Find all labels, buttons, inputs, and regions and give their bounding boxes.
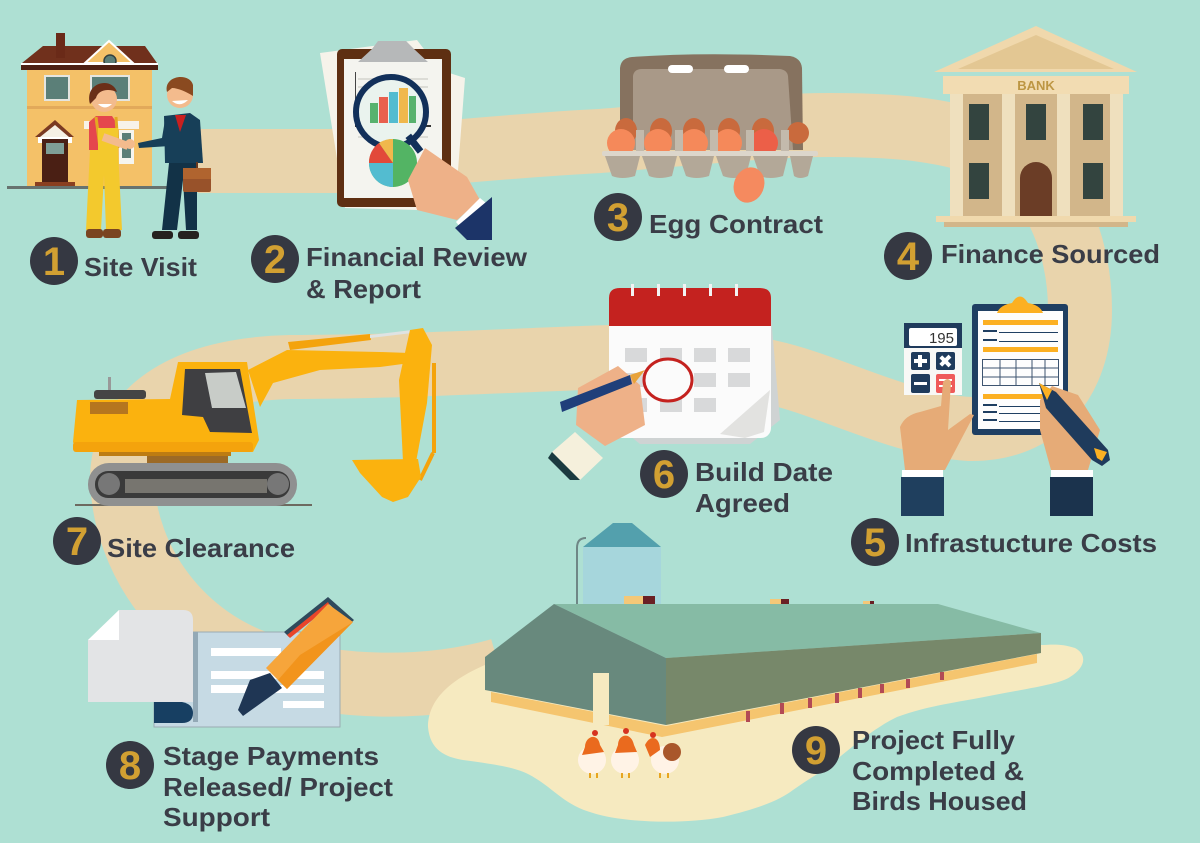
label 9: Birds Housed bbox=[852, 786, 1027, 816]
chickens bbox=[578, 728, 681, 778]
label 8 bbox=[106, 741, 393, 832]
icon: excavator bbox=[73, 328, 436, 506]
label 1 bbox=[30, 237, 197, 285]
winding path bbox=[122, 125, 1080, 685]
label 9: 9 bbox=[805, 729, 827, 773]
label 9: Project Fully bbox=[852, 725, 1016, 755]
label 5: 5 bbox=[864, 521, 886, 565]
label 7: Site Clearance bbox=[107, 533, 295, 563]
label 2 bbox=[251, 235, 528, 304]
label 4: 4 bbox=[897, 235, 920, 279]
label 8: Stage Payments bbox=[163, 741, 379, 771]
label 3 bbox=[594, 193, 823, 241]
icon: calculator and clipboard: 195 bbox=[929, 330, 954, 347]
label 3: 3 bbox=[607, 196, 629, 240]
label 4 bbox=[884, 232, 1160, 280]
label 9: Completed & bbox=[852, 756, 1024, 786]
icon: bank: BANK bbox=[1017, 78, 1055, 93]
label 1: 1 bbox=[43, 240, 65, 284]
label 8: 8 bbox=[119, 744, 141, 788]
label 3: Egg Contract bbox=[649, 209, 823, 239]
icon: calculator and clipboard bbox=[900, 296, 1110, 516]
label 7: 7 bbox=[66, 520, 88, 564]
icon: house and handshake bbox=[7, 33, 211, 239]
icon: farm shed with silo and chickens bbox=[485, 523, 1041, 778]
label 5 bbox=[851, 518, 1157, 566]
label 6 bbox=[640, 450, 833, 518]
icon: calendar bbox=[548, 284, 780, 480]
label 4: Finance Sourced bbox=[941, 239, 1160, 269]
businessman bbox=[125, 77, 211, 239]
label 2: 2 bbox=[264, 238, 286, 282]
label 7 bbox=[53, 517, 295, 565]
label 2: Financial Review bbox=[306, 242, 528, 272]
label 6: 6 bbox=[653, 453, 675, 497]
icon: cheque and pen bbox=[88, 597, 354, 727]
label 8: Support bbox=[163, 802, 270, 832]
icon: bank bbox=[934, 26, 1137, 227]
label 1: Site Visit bbox=[84, 252, 197, 282]
label 8: Released/ Project bbox=[163, 772, 393, 802]
sand area under farm bbox=[428, 645, 1083, 822]
label 2: & Report bbox=[306, 274, 421, 304]
label 9 bbox=[792, 725, 1027, 816]
label 6: Build Date bbox=[695, 457, 833, 487]
label 6: Agreed bbox=[695, 488, 790, 518]
icon: financial report bbox=[320, 40, 492, 240]
worker bbox=[86, 83, 128, 238]
icon: egg carton bbox=[602, 54, 818, 207]
label 5: Infrastucture Costs bbox=[905, 528, 1157, 558]
